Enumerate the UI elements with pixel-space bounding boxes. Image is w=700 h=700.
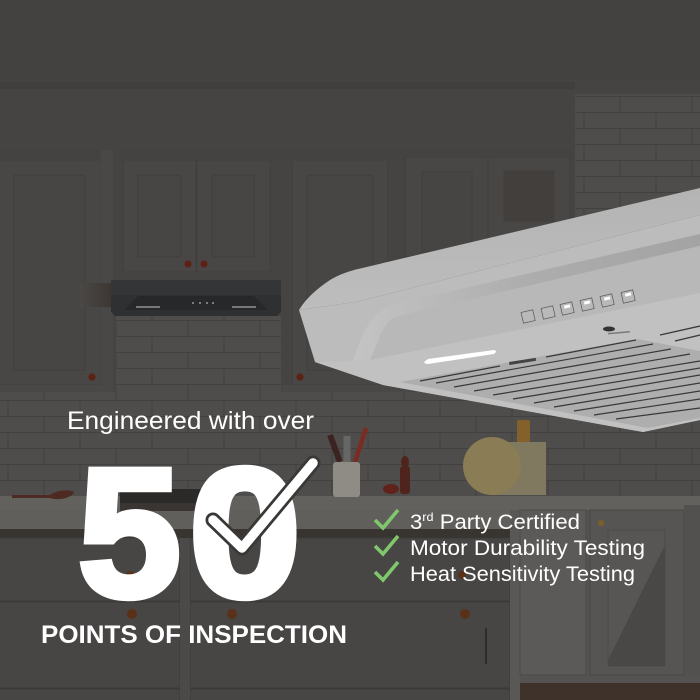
fold strip xyxy=(353,234,700,361)
upper cabinet left xyxy=(0,160,101,385)
range xyxy=(120,489,215,503)
cabinet knobs xyxy=(88,260,304,381)
cutting board xyxy=(463,420,546,495)
lower knobs xyxy=(126,571,470,619)
item: third party certified: 3 xyxy=(410,511,422,534)
big number 50 with check mark: 5 xyxy=(78,431,181,635)
upper cabinet right xyxy=(292,157,570,385)
big number 50 with check mark xyxy=(78,430,313,635)
hood top band xyxy=(299,188,700,310)
upper cabinet centre xyxy=(123,160,270,272)
hood underside xyxy=(315,293,700,432)
icon: green check 1 xyxy=(375,510,398,528)
hood front panel xyxy=(370,246,700,360)
utensil crock xyxy=(330,428,366,497)
small range hood in scene xyxy=(111,280,281,316)
icon: green check 2 xyxy=(375,536,398,554)
lower cabinets xyxy=(0,538,510,700)
hood shadow on cabinet xyxy=(80,283,111,307)
filter vents xyxy=(400,326,700,428)
checklist xyxy=(375,510,645,586)
tiled backsplash xyxy=(116,316,281,392)
led light xyxy=(424,350,496,364)
right base cabinets xyxy=(520,505,700,700)
stainless steel range hood xyxy=(299,188,700,432)
big number 50 with check mark: 0 xyxy=(189,430,301,635)
worktop xyxy=(0,496,700,510)
item: third party certified: rd xyxy=(422,510,434,524)
icon: green check 3 xyxy=(375,562,398,580)
subheading: points of inspection: POINTS OF INSPECTION xyxy=(41,621,347,649)
item: third party certified: Party Certified xyxy=(434,511,580,534)
control buttons xyxy=(521,290,635,323)
spoon xyxy=(12,490,74,499)
pepper mill xyxy=(400,456,410,494)
bowl and fruit xyxy=(383,484,399,494)
logo xyxy=(603,326,630,334)
hood front face xyxy=(299,215,700,432)
heading: Engineered with over: Engineered with over xyxy=(67,407,314,435)
item: heat sensitivity testing: Heat Sensitivity Testing xyxy=(410,563,635,586)
button lights xyxy=(564,292,631,309)
item: motor durability testing: Motor Durability Testing xyxy=(410,537,645,560)
